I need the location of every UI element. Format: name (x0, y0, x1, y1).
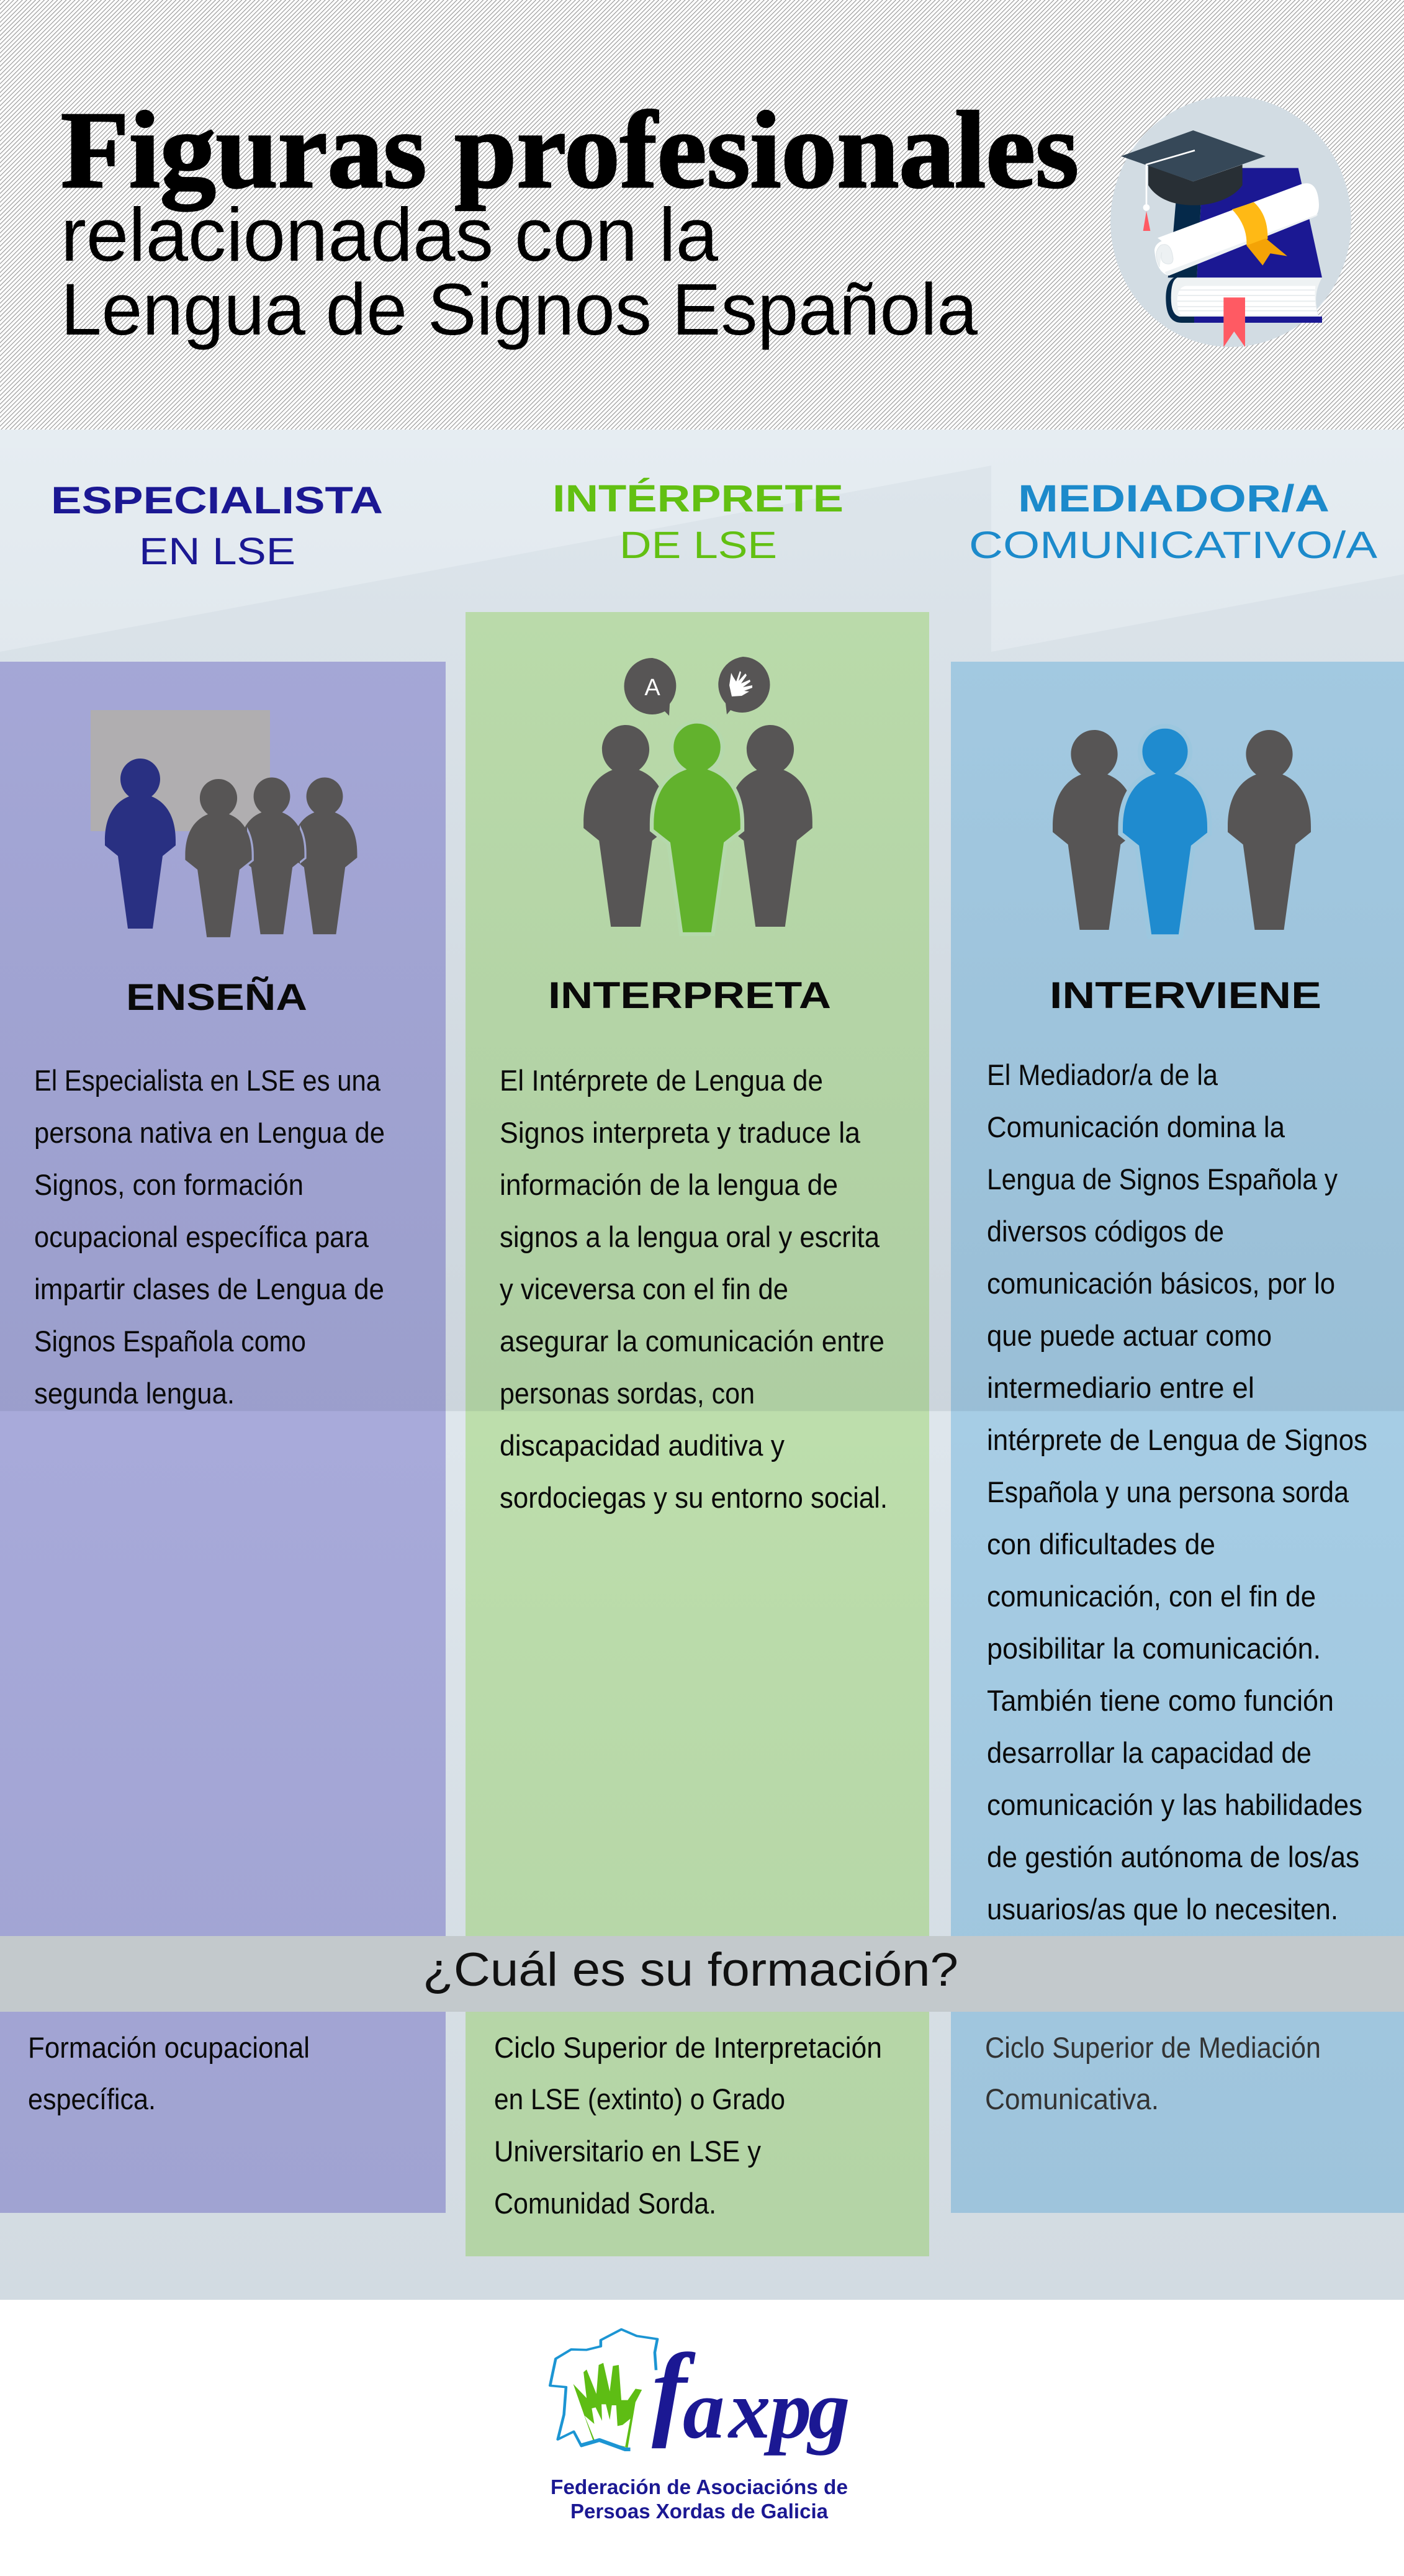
text: mediador training (985, 2031, 1321, 2115)
text: mediador description: de gestión autónoma de los/as (987, 1840, 1359, 1873)
text: interprete description (500, 1064, 888, 1514)
icon: graduation cap, diploma and books (1110, 96, 1351, 347)
heading: mediador: MEDIADOR/A (1018, 477, 1330, 520)
icon: teacher and students (91, 710, 357, 937)
footer background (0, 2300, 1404, 2576)
text: mediador description: El Mediador/a de la (987, 1058, 1218, 1091)
text: mediador description: Española y una persona sorda (987, 1475, 1349, 1508)
text: mediador description: Lengua de Signos Española y (987, 1163, 1338, 1196)
text: especialista description: Signos Española como (34, 1325, 306, 1358)
text: especialista training: específica. (28, 2083, 156, 2115)
text: interprete training: en LSE (extinto) o Grado (494, 2083, 785, 2115)
text: mediador description: comunicación, con el fin de (987, 1580, 1316, 1613)
logo: faxpg: x (727, 2364, 771, 2456)
heading: interprete (552, 477, 844, 566)
heading: mediador (969, 477, 1377, 566)
panel shading (0, 430, 1404, 2300)
text: interprete training: Comunidad Sorda. (494, 2187, 716, 2220)
text: interprete description: El Intérprete de Lengua de (500, 1064, 823, 1097)
title: relacionadas con la (61, 192, 718, 277)
text: mediador training: Ciclo Superior de Mediación (985, 2031, 1321, 2064)
text: especialista description: El Especialista en LSE es una (34, 1064, 381, 1097)
text: mediador description: usuarios/as que lo necesiten. (987, 1893, 1338, 1925)
heading: mediador: COMUNICATIVO/A (969, 524, 1377, 566)
text: interprete description: asegurar la comunicación entre (500, 1325, 884, 1358)
band: training question (0, 1936, 1404, 2012)
text: especialista description: segunda lengua. (34, 1377, 235, 1410)
panel: interprete (466, 612, 929, 2256)
text: mediador description: desarrollar la capacidad de (987, 1736, 1312, 1769)
logo: faxpg: Federación de Asociacións de (551, 2475, 848, 2498)
text: especialista description: impartir clases de Lengua de (34, 1272, 384, 1305)
text: mediador description (987, 1058, 1367, 1925)
subheading: interpreta: INTERPRETA (548, 975, 831, 1016)
text: mediador description: que puede actuar como (987, 1319, 1272, 1352)
heading: especialista: EN LSE (139, 530, 295, 572)
heading: especialista: ESPECIALISTA (51, 479, 383, 521)
heading: interprete: INTÉRPRETE (552, 477, 844, 520)
heading: interprete: DE LSE (619, 524, 777, 566)
logo: faxpg (550, 2330, 850, 2523)
section background (0, 430, 1404, 2300)
text: mediador description: intérprete de Lengua de Signos (987, 1423, 1367, 1456)
logo: faxpg: f (652, 2332, 696, 2449)
heading: especialista (51, 479, 383, 572)
panel: especialista (0, 662, 446, 2213)
title (61, 89, 1079, 351)
panel: mediador (951, 662, 1404, 2213)
text: mediador description: con dificultades de (987, 1528, 1215, 1560)
text: interprete description: información de la lengua de (500, 1168, 838, 1201)
title: Lengua de Signos Española (61, 269, 978, 351)
text: interprete description: signos a la lengua oral y escrita (500, 1220, 880, 1253)
text: interprete description: personas sordas, con (500, 1377, 755, 1410)
text: especialista training (28, 2031, 310, 2115)
text: mediador description: posibilitar la comunicación. (987, 1632, 1321, 1665)
logo: faxpg: g (806, 2364, 850, 2456)
text: especialista description: persona nativa en Lengua de (34, 1116, 385, 1149)
title: Figuras profesionales (61, 89, 1079, 211)
icon: mediator with two people (1053, 726, 1311, 937)
icon: interpreter with two people and speech bubbles (583, 657, 812, 934)
text: mediador training: Comunicativa. (985, 2083, 1159, 2115)
text: interprete description: y viceversa con el fin de (500, 1272, 788, 1305)
text: mediador description: Comunicación domina la (987, 1110, 1285, 1143)
text: mediador description: diversos códigos de (987, 1215, 1224, 1248)
band: training question: ¿Cuál es su formación? (423, 1943, 958, 1996)
text: especialista description (34, 1064, 385, 1410)
text: mediador description: También tiene como función (987, 1684, 1334, 1717)
text: mediador description: comunicación básicos, por lo (987, 1267, 1335, 1300)
logo: faxpg: a (683, 2364, 725, 2456)
text: especialista training: Formación ocupacional (28, 2031, 310, 2064)
subheading: enseña: ENSEÑA (126, 976, 307, 1018)
text: interprete training (494, 2031, 882, 2220)
text: especialista description: ocupacional específica para (34, 1220, 369, 1253)
icon: interpreter with two people and speech bubbles: A (644, 675, 660, 701)
text: interprete training: Universitario en LSE y (494, 2135, 761, 2168)
logo: faxpg: p (763, 2364, 812, 2456)
subheading: interviene: INTERVIENE (1050, 975, 1321, 1016)
logo: faxpg: Persoas Xordas de Galicia (570, 2500, 829, 2523)
text: mediador description: intermediario entre el (987, 1371, 1254, 1404)
text: interprete description: sordociegas y su entorno social. (500, 1481, 888, 1514)
text: interprete training: Ciclo Superior de Interpretación (494, 2031, 882, 2064)
text: interprete description: discapacidad auditiva y (500, 1429, 785, 1462)
text: interprete description: Signos interpreta y traduce la (500, 1116, 861, 1149)
header background (0, 0, 1404, 430)
text: mediador description: comunicación y las habilidades (987, 1788, 1362, 1821)
text: especialista description: Signos, con formación (34, 1168, 304, 1201)
